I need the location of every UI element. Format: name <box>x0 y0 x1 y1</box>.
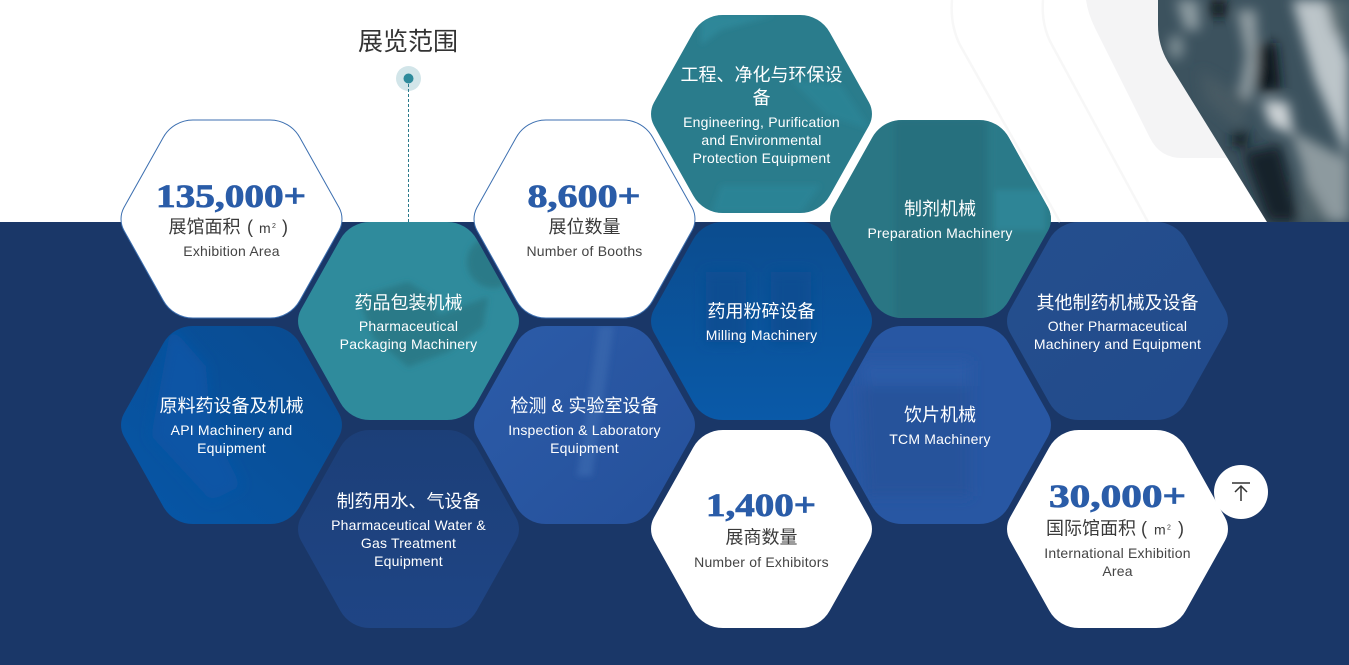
stat: exhibition area: ( <box>247 217 253 237</box>
photo: blurred gear in top-right corner <box>1150 0 1349 222</box>
panel: milling machinery: 药用粉碎设备 <box>708 302 816 322</box>
back-to-top button <box>1214 465 1268 519</box>
panel: other pharmaceutical machinery and equipment <box>1007 222 1228 420</box>
panel: pharmaceutical water and gas treatment equipment: Equipment <box>374 553 443 569</box>
panel: inspection and laboratory equipment: 检测 & 实验室设备 <box>510 396 659 416</box>
panel: pharmaceutical water and gas treatment equipment: Pharmaceutical Water & <box>331 517 486 533</box>
stat: international exhibition area: ( <box>1141 518 1147 538</box>
panel: API machinery and equipment <box>121 326 342 524</box>
stat: exhibition area: Exhibition Area <box>183 243 280 259</box>
title marker dot <box>396 66 421 91</box>
stat: international exhibition area: International Exhibition <box>1044 545 1191 561</box>
panel: milling machinery: Milling Machinery <box>706 327 817 343</box>
panel: other pharmaceutical machinery and equipment: Other Pharmaceutical <box>1048 318 1187 334</box>
panel: inspection and laboratory equipment: Inspection & Laboratory <box>508 422 661 438</box>
panel: pharmaceutical packaging machinery: Pharmaceutical <box>359 318 458 334</box>
stat: number of exhibitors: Number of Exhibitors <box>694 554 829 570</box>
panel: engineering, purification and environmental protection equipment: and Environmental <box>701 132 822 148</box>
panel: API machinery and equipment: Equipment <box>197 440 266 456</box>
panel: pharmaceutical packaging machinery: 药品包装机械 <box>354 293 462 313</box>
panel: API machinery and equipment: API Machinery and <box>171 422 292 438</box>
stat: international exhibition area: 30,000+ <box>1049 479 1186 515</box>
dashed connector line <box>408 84 410 222</box>
panel: other pharmaceutical machinery and equipment: 其他制药机械及设备 <box>1036 293 1198 313</box>
panel: engineering, purification and environmental protection equipment: 工程、净化与环保设 <box>680 65 842 85</box>
stat: number of booths: 8,600+ <box>528 179 640 215</box>
panel: pharmaceutical water and gas treatment equipment: 制药用水、气设备 <box>336 492 480 512</box>
stat: exhibition area: m <box>259 220 271 236</box>
stat: exhibition area: 展馆面积 <box>168 217 240 237</box>
panel: inspection and laboratory equipment <box>474 326 695 524</box>
stat: number of booths: Number of Booths <box>526 243 643 259</box>
panel: pharmaceutical packaging machinery <box>298 222 519 420</box>
panel: pharmaceutical water and gas treatment equipment: Gas Treatment <box>361 535 456 551</box>
panel: preparation machinery <box>830 120 1051 318</box>
panel: other pharmaceutical machinery and equipment: Machinery and Equipment <box>1034 336 1201 352</box>
stat: exhibition area: ) <box>282 217 288 237</box>
panel: TCM machinery: TCM Machinery <box>889 431 991 447</box>
stat: international exhibition area: 国际馆面积 <box>1046 518 1136 538</box>
panel: pharmaceutical packaging machinery: Packaging Machinery <box>340 336 477 352</box>
decorative light hexagon outlines <box>952 0 1148 222</box>
stat: international exhibition area: ) <box>1178 518 1184 538</box>
section title: 展览范围 <box>358 28 458 56</box>
panel: milling machinery <box>651 222 872 420</box>
panel: preparation machinery: 制剂机械 <box>904 199 976 219</box>
stat: number of booths: 展位数量 <box>548 217 620 237</box>
navy background band <box>0 222 1349 665</box>
panel: engineering, purification and environmental protection equipment: Engineering, Purification <box>683 114 840 130</box>
panel: engineering, purification and environmental protection equipment: Protection Equipment <box>693 150 830 166</box>
stat: exhibition area: 2 <box>272 223 276 230</box>
stat: exhibition area <box>121 120 342 318</box>
panel: engineering, purification and environmental protection equipment <box>651 15 872 213</box>
stat: number of booths <box>474 120 695 318</box>
stat: international exhibition area: 2 <box>1167 524 1171 532</box>
panel: TCM machinery <box>830 326 1051 524</box>
panel: TCM machinery: 饮片机械 <box>904 405 976 425</box>
stat: international exhibition area: m <box>1154 522 1166 538</box>
stat: number of exhibitors: 展商数量 <box>726 528 798 548</box>
panel: preparation machinery: Preparation Machinery <box>867 225 1013 241</box>
stat: number of exhibitors: 1,400+ <box>706 488 816 524</box>
panel: inspection and laboratory equipment: Equipment <box>550 440 619 456</box>
panel: engineering, purification and environmental protection equipment: 备 <box>752 88 770 108</box>
panel: pharmaceutical water and gas treatment equipment <box>298 430 519 628</box>
stat: number of exhibitors <box>651 430 872 628</box>
stat: international exhibition area: Area <box>1102 563 1133 579</box>
stat: international exhibition area <box>1007 430 1228 628</box>
stat: exhibition area: 135,000+ <box>156 179 306 215</box>
light grey hexagon behind photo <box>1086 0 1240 158</box>
panel: API machinery and equipment: 原料药设备及机械 <box>160 396 304 416</box>
